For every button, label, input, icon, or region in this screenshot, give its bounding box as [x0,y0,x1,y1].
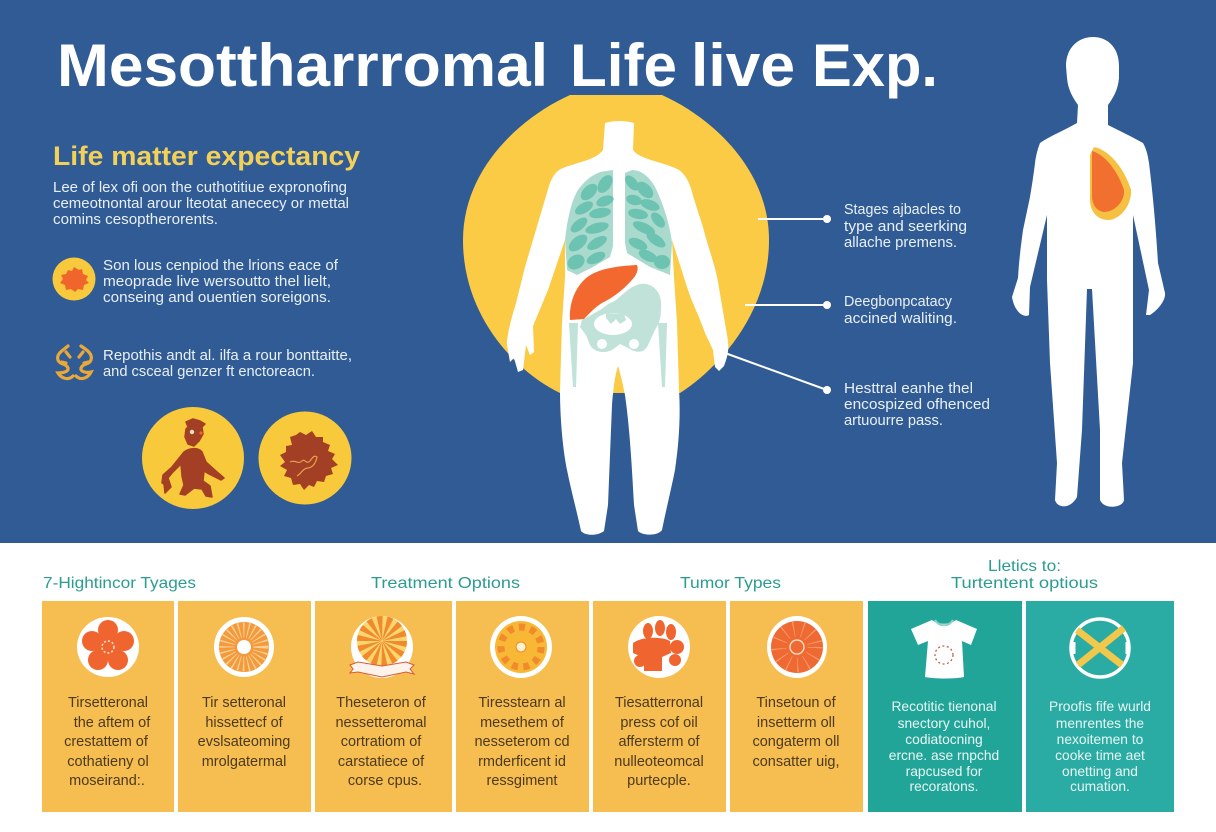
callout: hand line [725,353,990,429]
card 4 [456,601,589,812]
panel: central anatomy figure [463,95,769,535]
text block: evslsateoming [198,734,290,750]
text block: first note: conseing and ouentien soreigons. [103,290,331,306]
organ: pelvis and leg bones [569,284,667,387]
text block: rapcused for [906,764,983,779]
heading: types: 7-Hightincor Tyages [43,575,196,592]
text block: ercne. ase rnpchd [889,748,999,763]
text block: cortratiom of [341,734,422,750]
text block: second note: Repothis andt al. ilfa a rour bonttaitte, [103,348,352,364]
callouts: leader lines with notes [725,202,990,429]
text block: consatter uig, [752,754,840,770]
text block: cooke time aet [1055,748,1145,763]
title: Exp. [812,32,938,99]
text block: corse cpus. [348,773,422,789]
text block: crestattem of [64,734,149,750]
heading: right column: Turtentent optious [951,575,1098,592]
text block: recoratons. [909,779,979,794]
text block: carstatiece of [338,754,425,770]
icon: paw shape [628,616,690,678]
text block: cothatieny ol [67,754,149,770]
text block: first note [103,258,339,306]
text block [198,695,290,770]
text block: second note [103,348,352,380]
text block: Proofis fife wurld [1049,699,1151,714]
callout: hand line: Hesttral eanhe thel [844,381,973,397]
text block: mesethem of [480,715,565,731]
text block: Theseteron of [336,695,427,711]
text block [335,695,427,789]
text block: second note: and csceal genzer ft enctoreacn. [103,364,315,380]
text block: Recotitic tienonal [891,699,997,714]
card 2 [178,601,311,812]
callout: hand line: artuourre pass. [844,413,943,429]
card 5 [593,601,726,812]
text block: mrolgatermal [202,754,286,770]
text block: first note: Son lous cenpiod the lrions eace of [103,258,339,274]
callout: stages [758,202,967,251]
text block: nesseterom cd [474,734,570,750]
icon: dotted yellow disc [490,616,552,678]
text block: Tiesatterronal [615,695,703,711]
organ: right lung [622,170,672,275]
icon: figure in yellow circle [142,407,244,509]
text block [474,695,570,789]
text block: hissettecf of [205,715,284,731]
text block: Tirsetteronal [68,695,148,711]
text block: ressgiment [487,773,557,789]
text block: nexoitemen to [1057,732,1144,747]
text block: onetting and [1062,764,1138,779]
panel: left intro column [52,141,360,509]
callout: stages: type and seerking [844,219,967,235]
card 1 [42,601,174,812]
heading: right column: Lletics to: [988,558,1061,575]
title: live [691,32,795,99]
text block: intro paragraph: comins cesoptherorents. [53,212,218,228]
card 6 [730,601,863,812]
text block: intro paragraph: Lee of lex ofi oon the cuthotitiue expronofing [53,180,347,196]
callout: stages: Stages ajbacles to [844,202,961,218]
text block: first note: meoprade live wersoutto thel lielt, [103,274,331,290]
text block: Tinsetoun of [756,695,837,711]
icon: crossed bands [1071,619,1129,677]
text block [614,695,704,789]
callout: stages: allache premens. [844,235,957,251]
text block [752,695,840,770]
text block [64,695,151,789]
text block: cumation. [1070,779,1130,794]
card 7 [868,601,1022,812]
text block: moseirand:. [69,773,145,789]
text block: purtecple. [627,773,691,789]
organ: liver [570,265,638,320]
title: Life [570,32,677,99]
text block: intro paragraph: cemeotnontal arour lteotat anececy or mettal [53,196,349,212]
heading: tumor types: Tumor Types [680,575,781,592]
title: Mesottharrromal [57,32,548,99]
text block: snectory cuhol, [898,716,990,731]
icon: white t-shirt [911,620,977,678]
heading: right column [951,558,1098,592]
icon: spiked cell in yellow circle [258,412,352,504]
icon: sunburst with ribbon [350,616,414,678]
icon: orange flower [77,617,139,677]
text block: insetterm oll [757,715,835,731]
panel: blue hero background [0,0,1216,543]
text block [889,699,999,794]
icon: twin curled organisms [58,346,91,379]
callout: prognosis: accined waliting. [844,311,957,327]
text block: intro paragraph [53,180,349,228]
text block: rmderficent id [478,754,566,770]
text block: Tir setteronal [202,695,286,711]
card 3 [315,601,452,812]
text block: Tiresstearn al [478,695,566,711]
text block: codiatocning [905,732,983,747]
text block: affersterm of [618,734,701,750]
card 8 [1026,601,1174,812]
heading: treatment options: Treatment Options [371,575,520,592]
text block: congaterm oll [752,734,840,750]
icon: radial ring [214,617,274,677]
yellow halo circle [463,95,769,393]
callout: prognosis [745,294,957,327]
text block [1049,699,1151,794]
organ: highlighted lung [1090,147,1131,220]
text block: the aftem of [74,715,151,731]
text block: nessetteromal [335,715,427,731]
heading: life expectancy: Life matter expectancy [53,141,360,171]
text block: menrentes the [1056,716,1144,731]
icon: spiral flower [767,616,827,678]
text block: press cof oil [620,715,698,731]
body silhouette [1012,37,1165,507]
body silhouette [507,121,728,535]
icon: orange cell badge [52,258,96,300]
text block: nulleoteomcal [614,754,704,770]
organ: left lung [565,170,616,275]
callout: prognosis: Deegbonpcatacy [844,294,953,310]
callout: hand line: encospized ofhenced [844,397,990,413]
section headings [43,558,1098,592]
panel: right silhouette [1012,37,1165,507]
title [57,32,938,99]
